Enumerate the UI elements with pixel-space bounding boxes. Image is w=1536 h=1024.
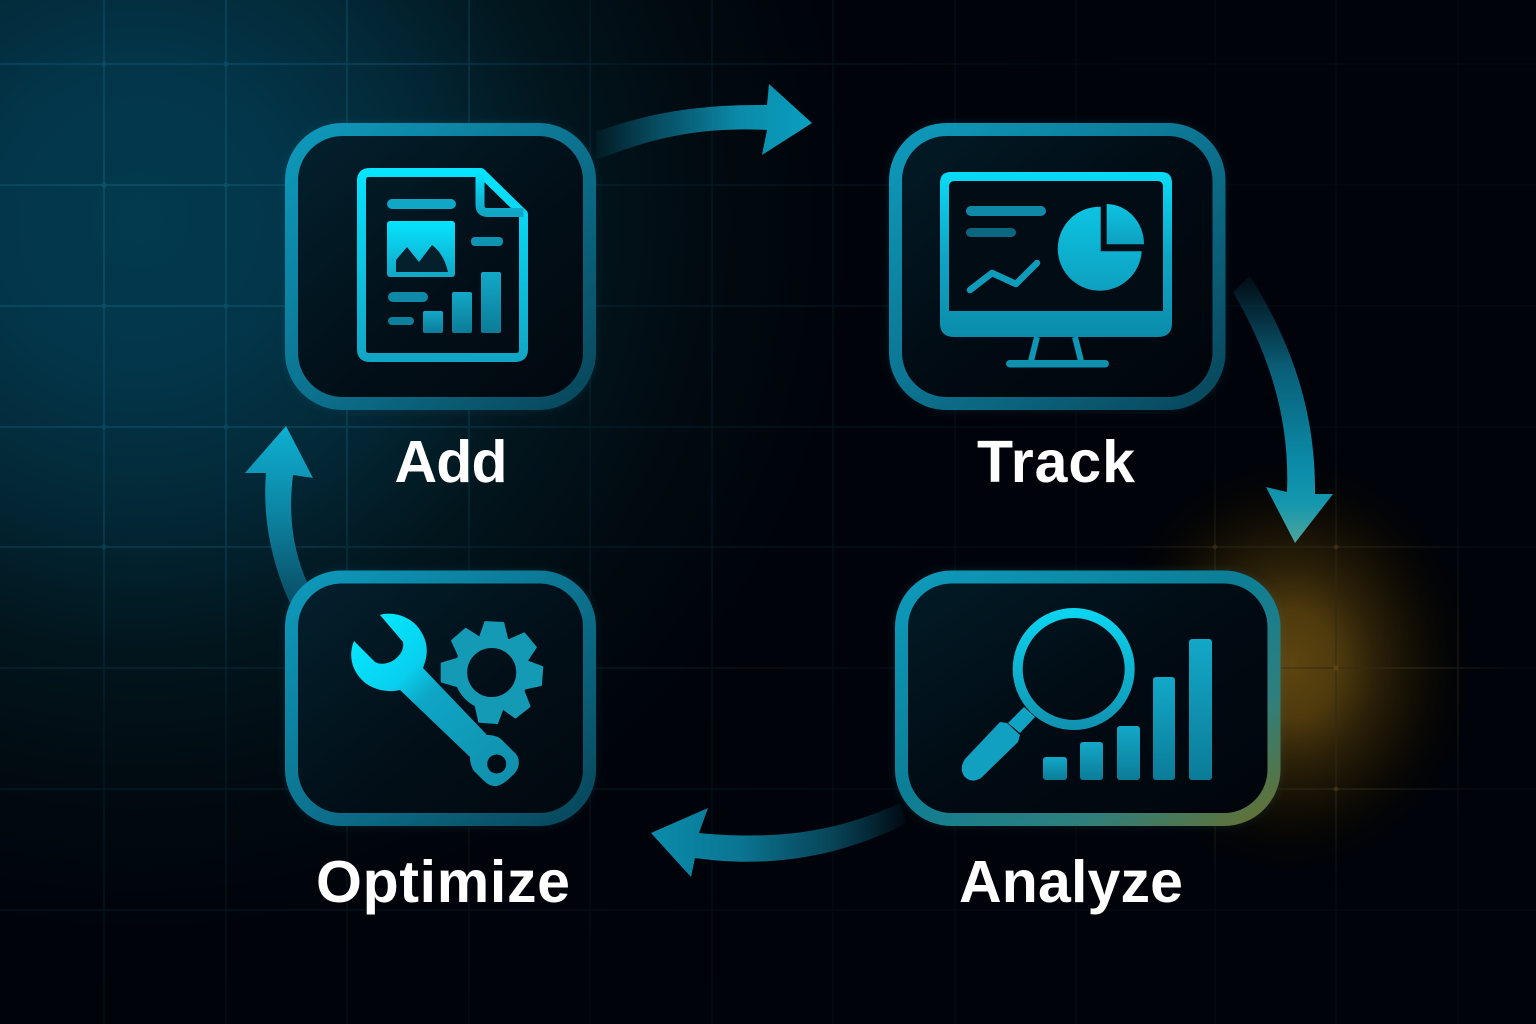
label: optimize: Optimize [316,849,570,915]
arrow: analyze to optimize [651,803,907,877]
panel: add [292,130,590,404]
panel: track [896,130,1219,404]
panel: analyze [902,577,1274,820]
icon: document with chart [362,172,524,358]
arrow: optimize to add [245,426,313,603]
icon: monitor with charts [940,172,1172,368]
panel: optimize [292,577,590,820]
arrow: track to analyze [1233,276,1333,543]
icon: magnifier with bars [962,613,1212,781]
arrow: add to track [596,84,812,160]
icon: wrench and gear [351,614,543,786]
label: analyze: Analyze [959,849,1183,915]
label: add: Add [394,429,508,495]
label: track: Track [977,429,1135,495]
